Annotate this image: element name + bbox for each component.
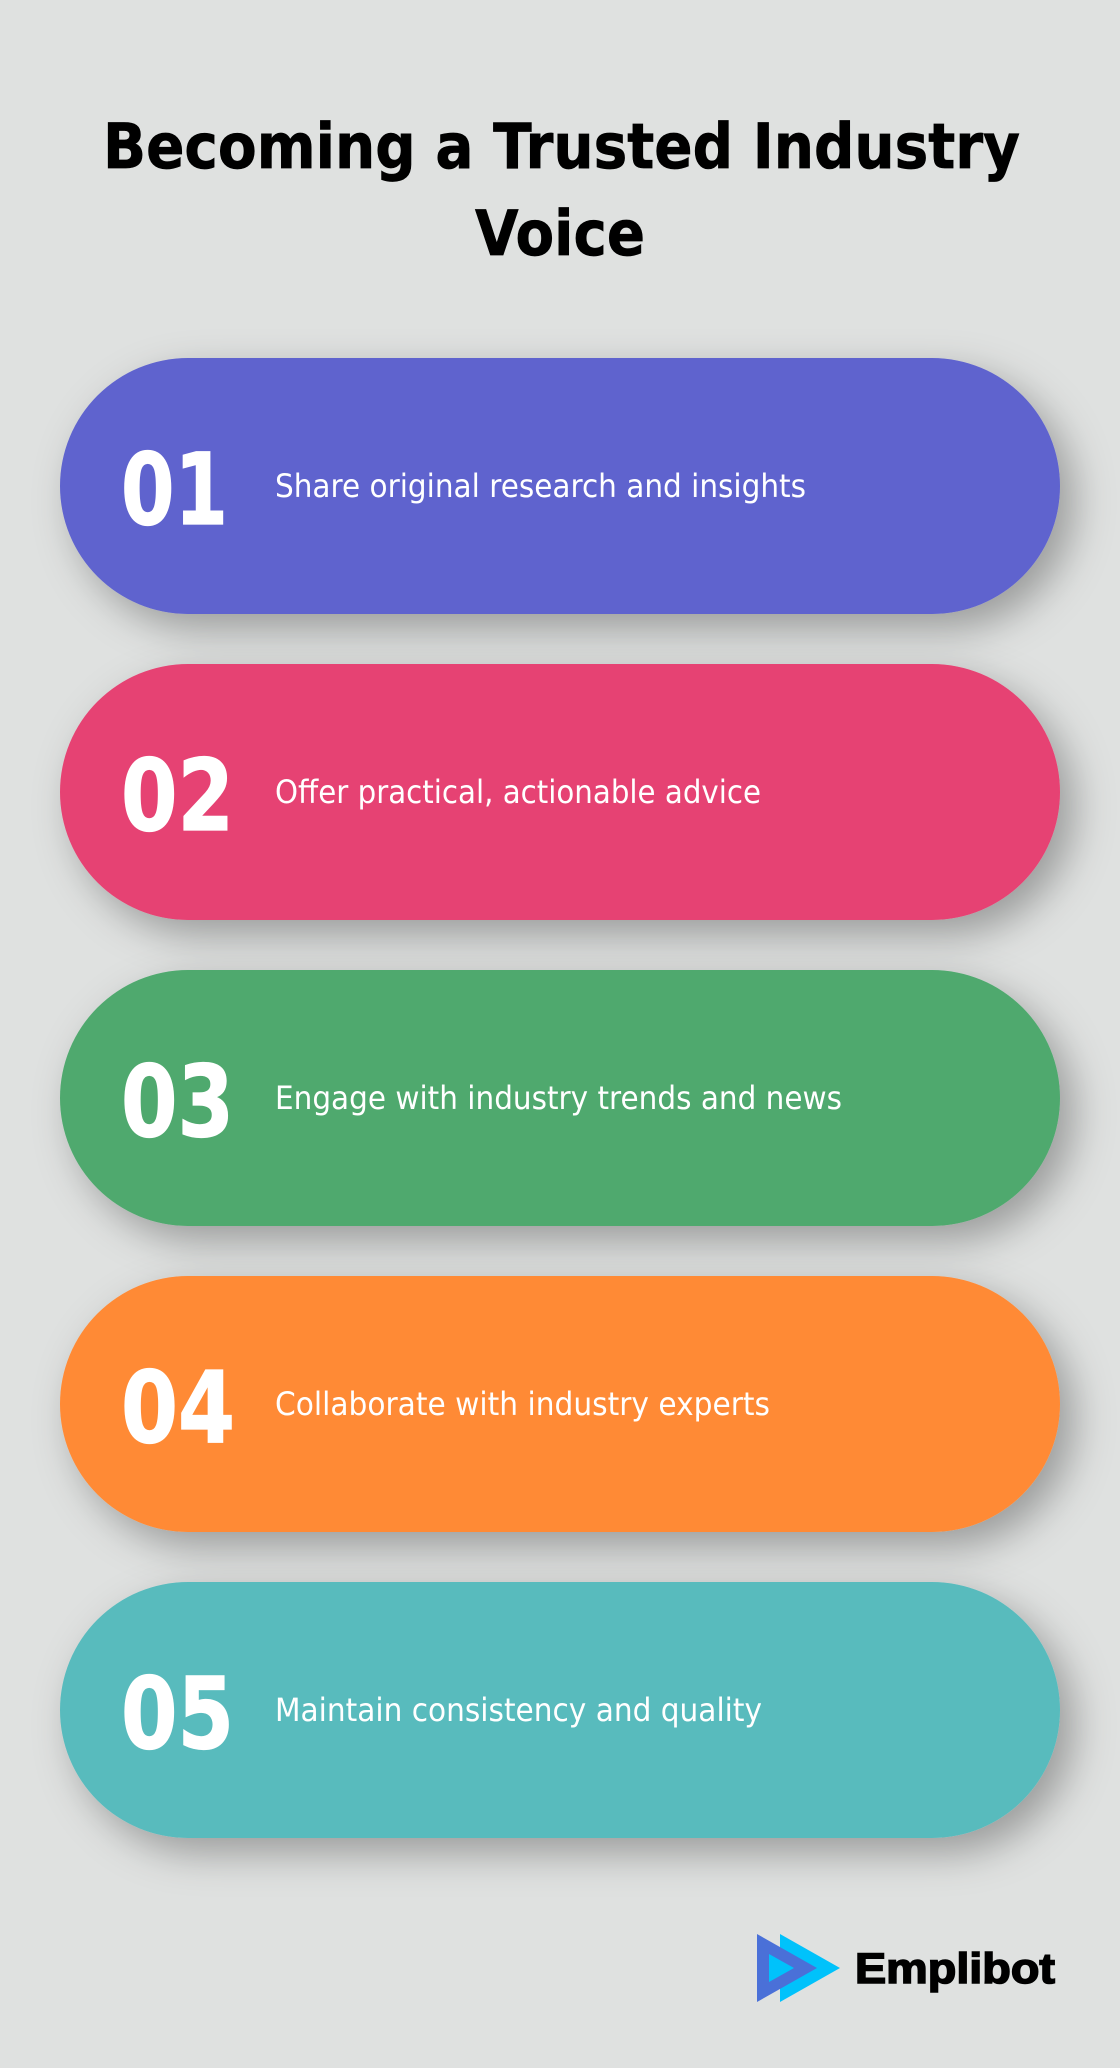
pill background	[60, 970, 1060, 1226]
pill background	[60, 358, 1060, 614]
pill background	[60, 1582, 1060, 1838]
title: Voice	[475, 197, 645, 270]
text: step 01: Share original research and insights	[275, 467, 806, 505]
icon: play triangles	[757, 1934, 840, 2002]
number 01: 01	[121, 433, 228, 548]
pill background	[60, 664, 1060, 920]
wordmark: Emplibot	[855, 1945, 1055, 1993]
number 03: 03	[121, 1045, 234, 1160]
number 04: 04	[121, 1351, 235, 1466]
text: step 03: Engage with industry trends and news	[275, 1079, 842, 1117]
panel: step 03	[60, 970, 1060, 1226]
panel: step 05	[60, 1582, 1060, 1838]
panel: step 02	[60, 664, 1060, 920]
panel: step 01	[60, 358, 1060, 614]
title	[103, 110, 1020, 270]
text: step 04: Collaborate with industry experts	[275, 1385, 770, 1423]
number 02: 02	[121, 739, 234, 854]
title: Becoming a Trusted Industry	[103, 110, 1020, 183]
text: step 02: Offer practical, actionable advice	[275, 773, 761, 811]
number 05: 05	[121, 1657, 234, 1772]
text: step 05: Maintain consistency and quality	[275, 1691, 762, 1729]
pill background	[60, 1276, 1060, 1532]
panel: step 04	[60, 1276, 1060, 1532]
logo: Emplibot	[757, 1934, 1055, 2002]
